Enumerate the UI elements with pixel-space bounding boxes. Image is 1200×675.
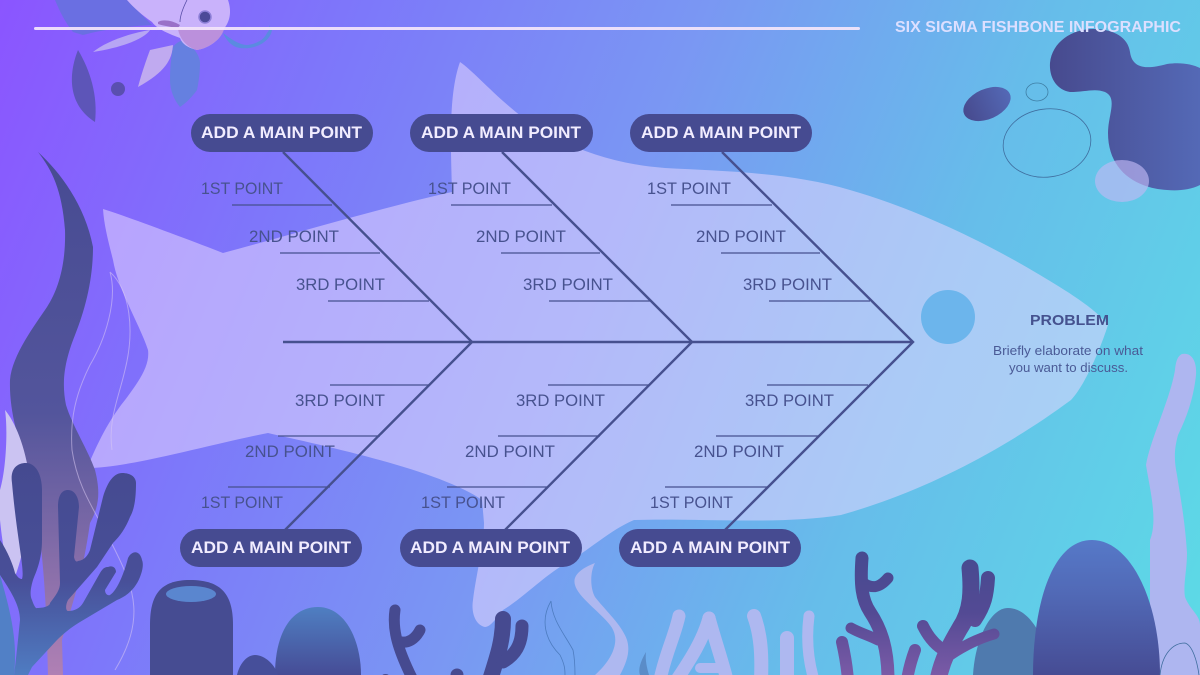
main point pills: ADD A MAIN POINT (201, 123, 363, 142)
lower point labels: 3RD POINT (745, 391, 834, 410)
spine and bones (283, 152, 913, 530)
goldfish eye (199, 11, 211, 23)
lower point labels: 1ST POINT (201, 493, 283, 512)
upper point labels: 2ND POINT (249, 227, 339, 246)
upper point labels: 3RD POINT (296, 275, 385, 294)
lower point labels: 2ND POINT (694, 442, 784, 461)
goldfish (55, 0, 272, 122)
blue rock (275, 607, 361, 675)
top blob cluster (958, 29, 1200, 202)
rocks (237, 607, 361, 675)
upper point labels: 3RD POINT (743, 275, 832, 294)
right coral (842, 558, 994, 675)
small outline bubble (1026, 83, 1048, 101)
lower point labels: 1ST POINT (421, 493, 505, 512)
small rock (237, 655, 278, 675)
seabed left strip (0, 575, 15, 675)
upper point labels: 1ST POINT (201, 179, 283, 198)
pale left frond (0, 410, 30, 585)
barrel body (150, 580, 233, 675)
fish eye (921, 290, 975, 344)
small dark ellipse (958, 80, 1016, 128)
lower point labels (201, 391, 834, 512)
seaweed outline strands (72, 272, 134, 670)
outline bubble rock (1160, 643, 1199, 675)
lower point labels: 3RD POINT (295, 391, 385, 410)
upper point labels: 2ND POINT (476, 227, 566, 246)
goldfish fins (93, 30, 150, 52)
upper point labels: 3RD POINT (523, 275, 613, 294)
mid coral (385, 610, 522, 675)
main point pills: ADD A MAIN POINT (191, 538, 352, 557)
problem description: Briefly elaborate on what (993, 344, 1144, 358)
problem text (993, 312, 1144, 375)
problem description: you want to discuss. (1009, 361, 1128, 375)
left seaweed (10, 152, 98, 675)
thin outline frond (545, 601, 575, 675)
title: SIX SIGMA FISHBONE INFOGRAPHIC (895, 19, 1181, 36)
upper point labels: 2ND POINT (696, 227, 786, 246)
barrel rim (166, 586, 216, 602)
bubble (111, 82, 125, 96)
upper point labels (201, 179, 832, 294)
lower point labels: 3RD POINT (516, 391, 605, 410)
left coral (0, 463, 143, 675)
barrel sponge (150, 580, 233, 675)
problem description (993, 344, 1144, 375)
lilac coral (660, 616, 814, 675)
upper point labels: 1ST POINT (647, 179, 731, 198)
branch lines (228, 205, 870, 487)
main point pills: ADD A MAIN POINT (641, 123, 802, 142)
large right rock (1033, 540, 1160, 675)
problem heading: PROBLEM (1030, 312, 1109, 329)
goldfish tail (72, 50, 96, 122)
large blob (1050, 29, 1200, 190)
large outline bubble (999, 103, 1095, 183)
right lilac seaweed (1146, 354, 1200, 675)
goldfish body (127, 0, 230, 50)
back teal rock (973, 608, 1050, 675)
upper point labels: 1ST POINT (428, 179, 511, 198)
fish silhouette (87, 62, 1108, 627)
main point pills: ADD A MAIN POINT (421, 123, 582, 142)
header rule (34, 27, 860, 30)
main point pills (180, 114, 812, 567)
small teal frond (639, 652, 649, 675)
main point pills: ADD A MAIN POINT (630, 538, 791, 557)
lower point labels: 1ST POINT (650, 493, 733, 512)
pale ellipse (1095, 160, 1149, 202)
lower point labels: 2ND POINT (465, 442, 555, 461)
main point pills: ADD A MAIN POINT (410, 538, 571, 557)
fishbone diagram (180, 114, 913, 567)
lilac ribbon seaweed (574, 563, 628, 675)
lower point labels: 2ND POINT (245, 442, 335, 461)
